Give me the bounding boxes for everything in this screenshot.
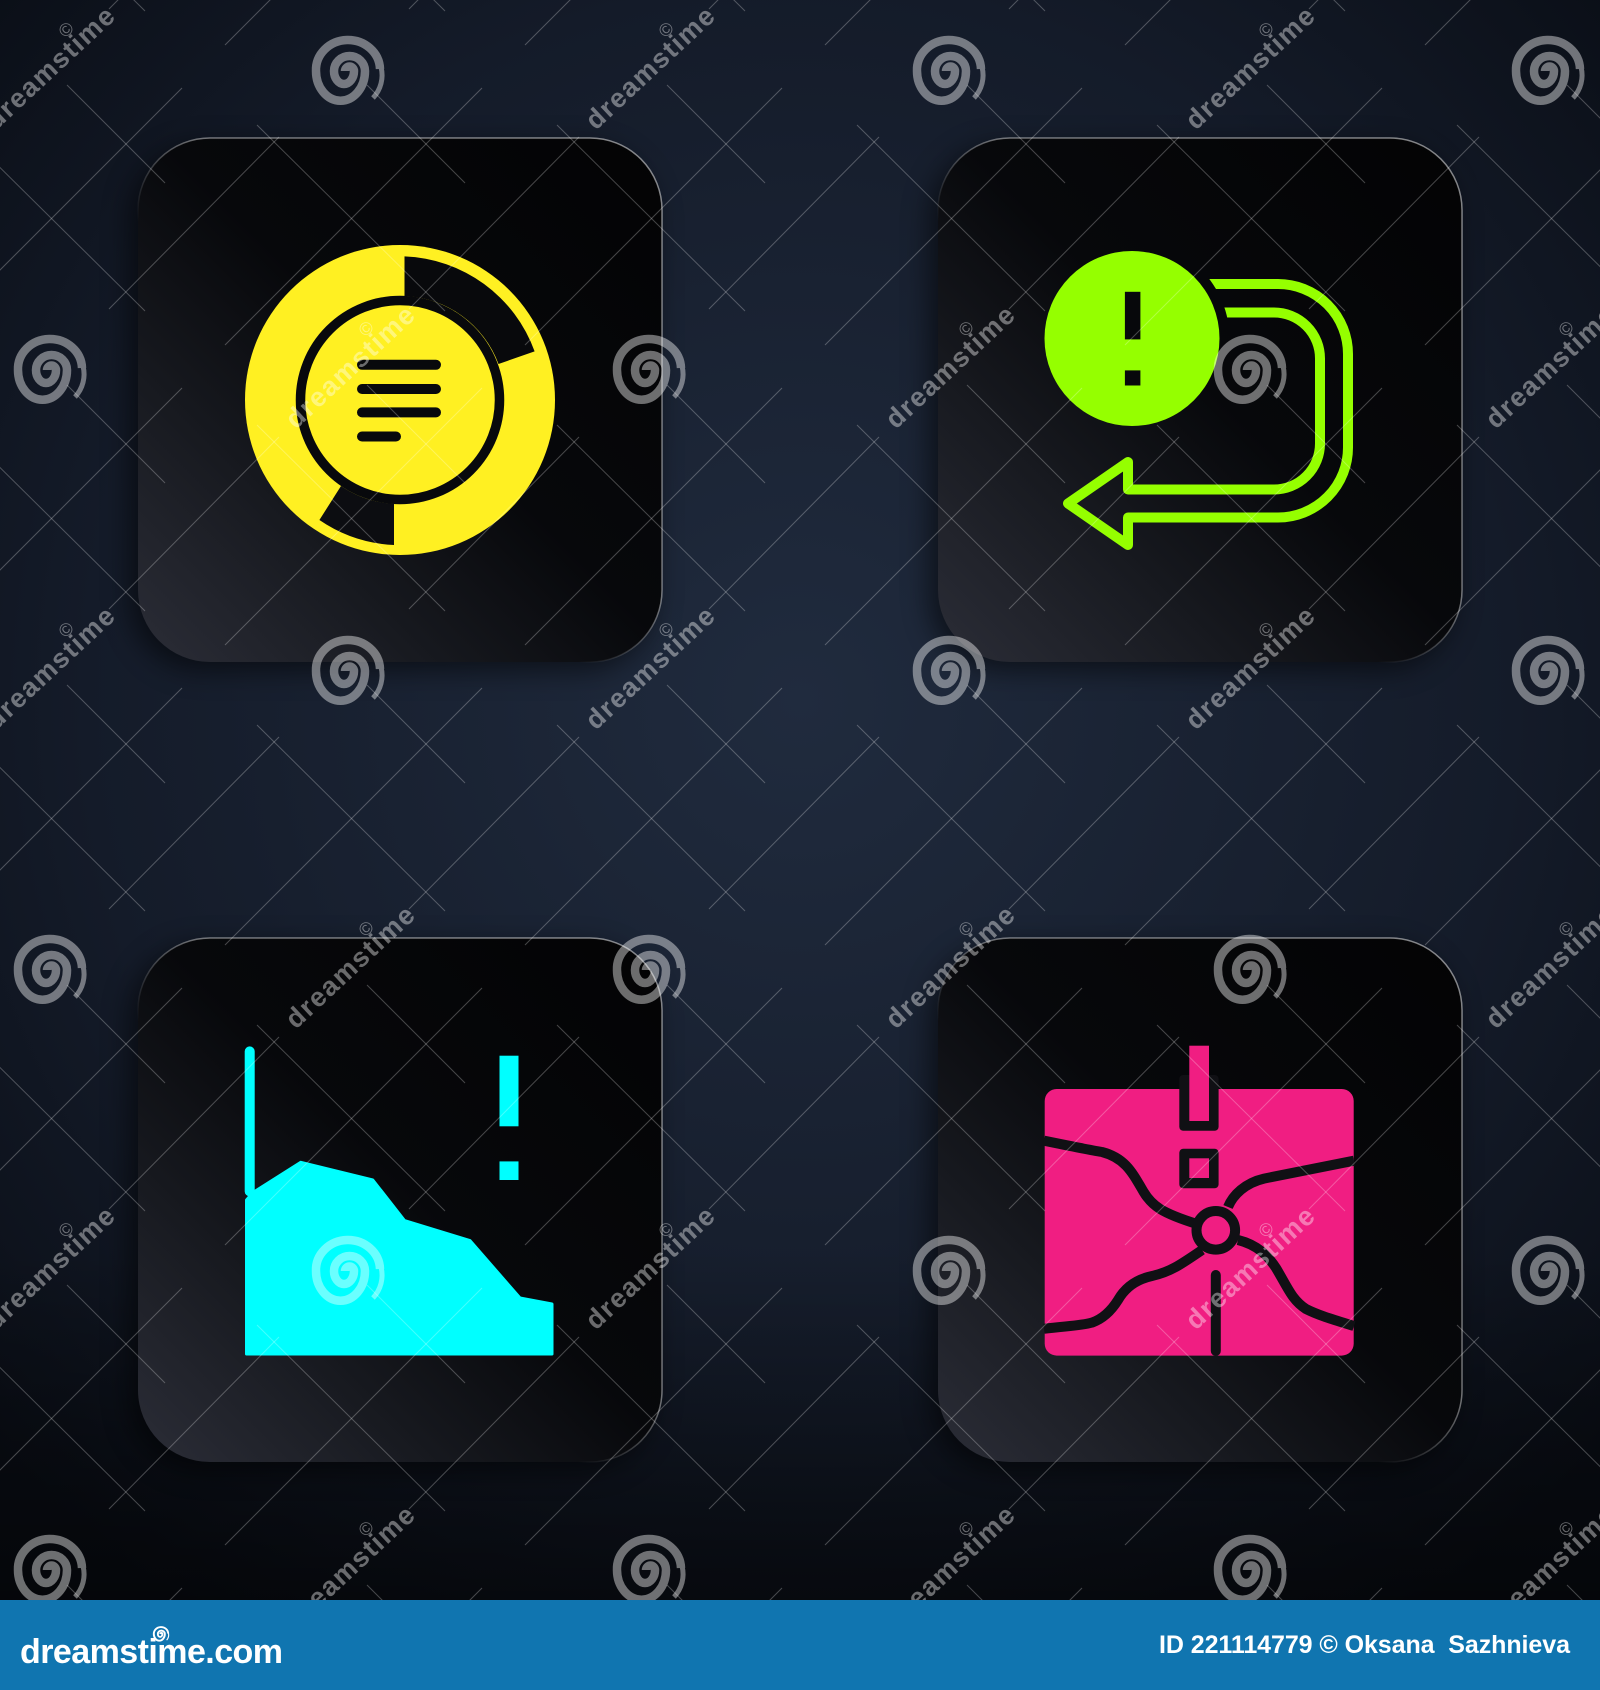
watermark overlay: © [655,18,678,41]
watermark overlay: © [1255,618,1278,641]
watermark overlay: © [55,1218,78,1241]
watermark overlay: © [355,317,378,340]
watermark overlay: dreamstime [579,1201,721,1335]
footer logo text: dreamstime.com [20,1633,283,1671]
watermark overlay: © [1255,1218,1278,1241]
watermark overlay: © [1555,1517,1578,1540]
watermark overlay: © [1555,917,1578,940]
watermark overlay: dreamstime [279,300,421,434]
panel: pink road map [930,938,1462,1470]
watermark overlay: dreamstime [879,1500,1021,1634]
image credit: ID 221114779 © Oksana Sazhnieva [1159,1631,1571,1659]
watermark overlay: © [55,18,78,41]
panel: green return arrow [930,138,1462,670]
watermark overlay: dreamstime [579,1,721,135]
watermark overlay: © [955,917,978,940]
watermark overlay: dreamstime [1179,601,1321,735]
watermark overlay: dreamstime [279,900,421,1034]
watermark overlay: © [355,1517,378,1540]
watermark overlay: © [355,917,378,940]
panel: yellow donut chart [130,138,662,670]
watermark overlay: © [955,1517,978,1540]
watermark overlay: dreamstime [1179,1,1321,135]
watermark overlay: dreamstime [1179,1201,1321,1335]
icon: road map with alert mark [1044,1046,1354,1356]
panel: cyan area chart [130,938,662,1470]
watermark overlay: dreamstime [579,601,721,735]
watermark overlay: © [655,1218,678,1241]
icon: alert circle with return arrow [1044,251,1348,545]
icon: declining area chart with alert mark [245,1046,552,1354]
footer band [0,1600,1600,1690]
icon: donut chart with text lines [245,245,555,555]
icon: logo spiral [154,1627,169,1641]
watermark overlay: © [655,618,678,641]
watermark overlay: © [55,618,78,641]
watermark overlay: dreamstime [879,900,1021,1034]
watermark overlay: © [1555,317,1578,340]
watermark overlay: © [1255,18,1278,41]
watermark overlay: © [955,317,978,340]
watermark overlay: dreamstime [279,1500,421,1634]
watermark overlay: dreamstime [879,300,1021,434]
